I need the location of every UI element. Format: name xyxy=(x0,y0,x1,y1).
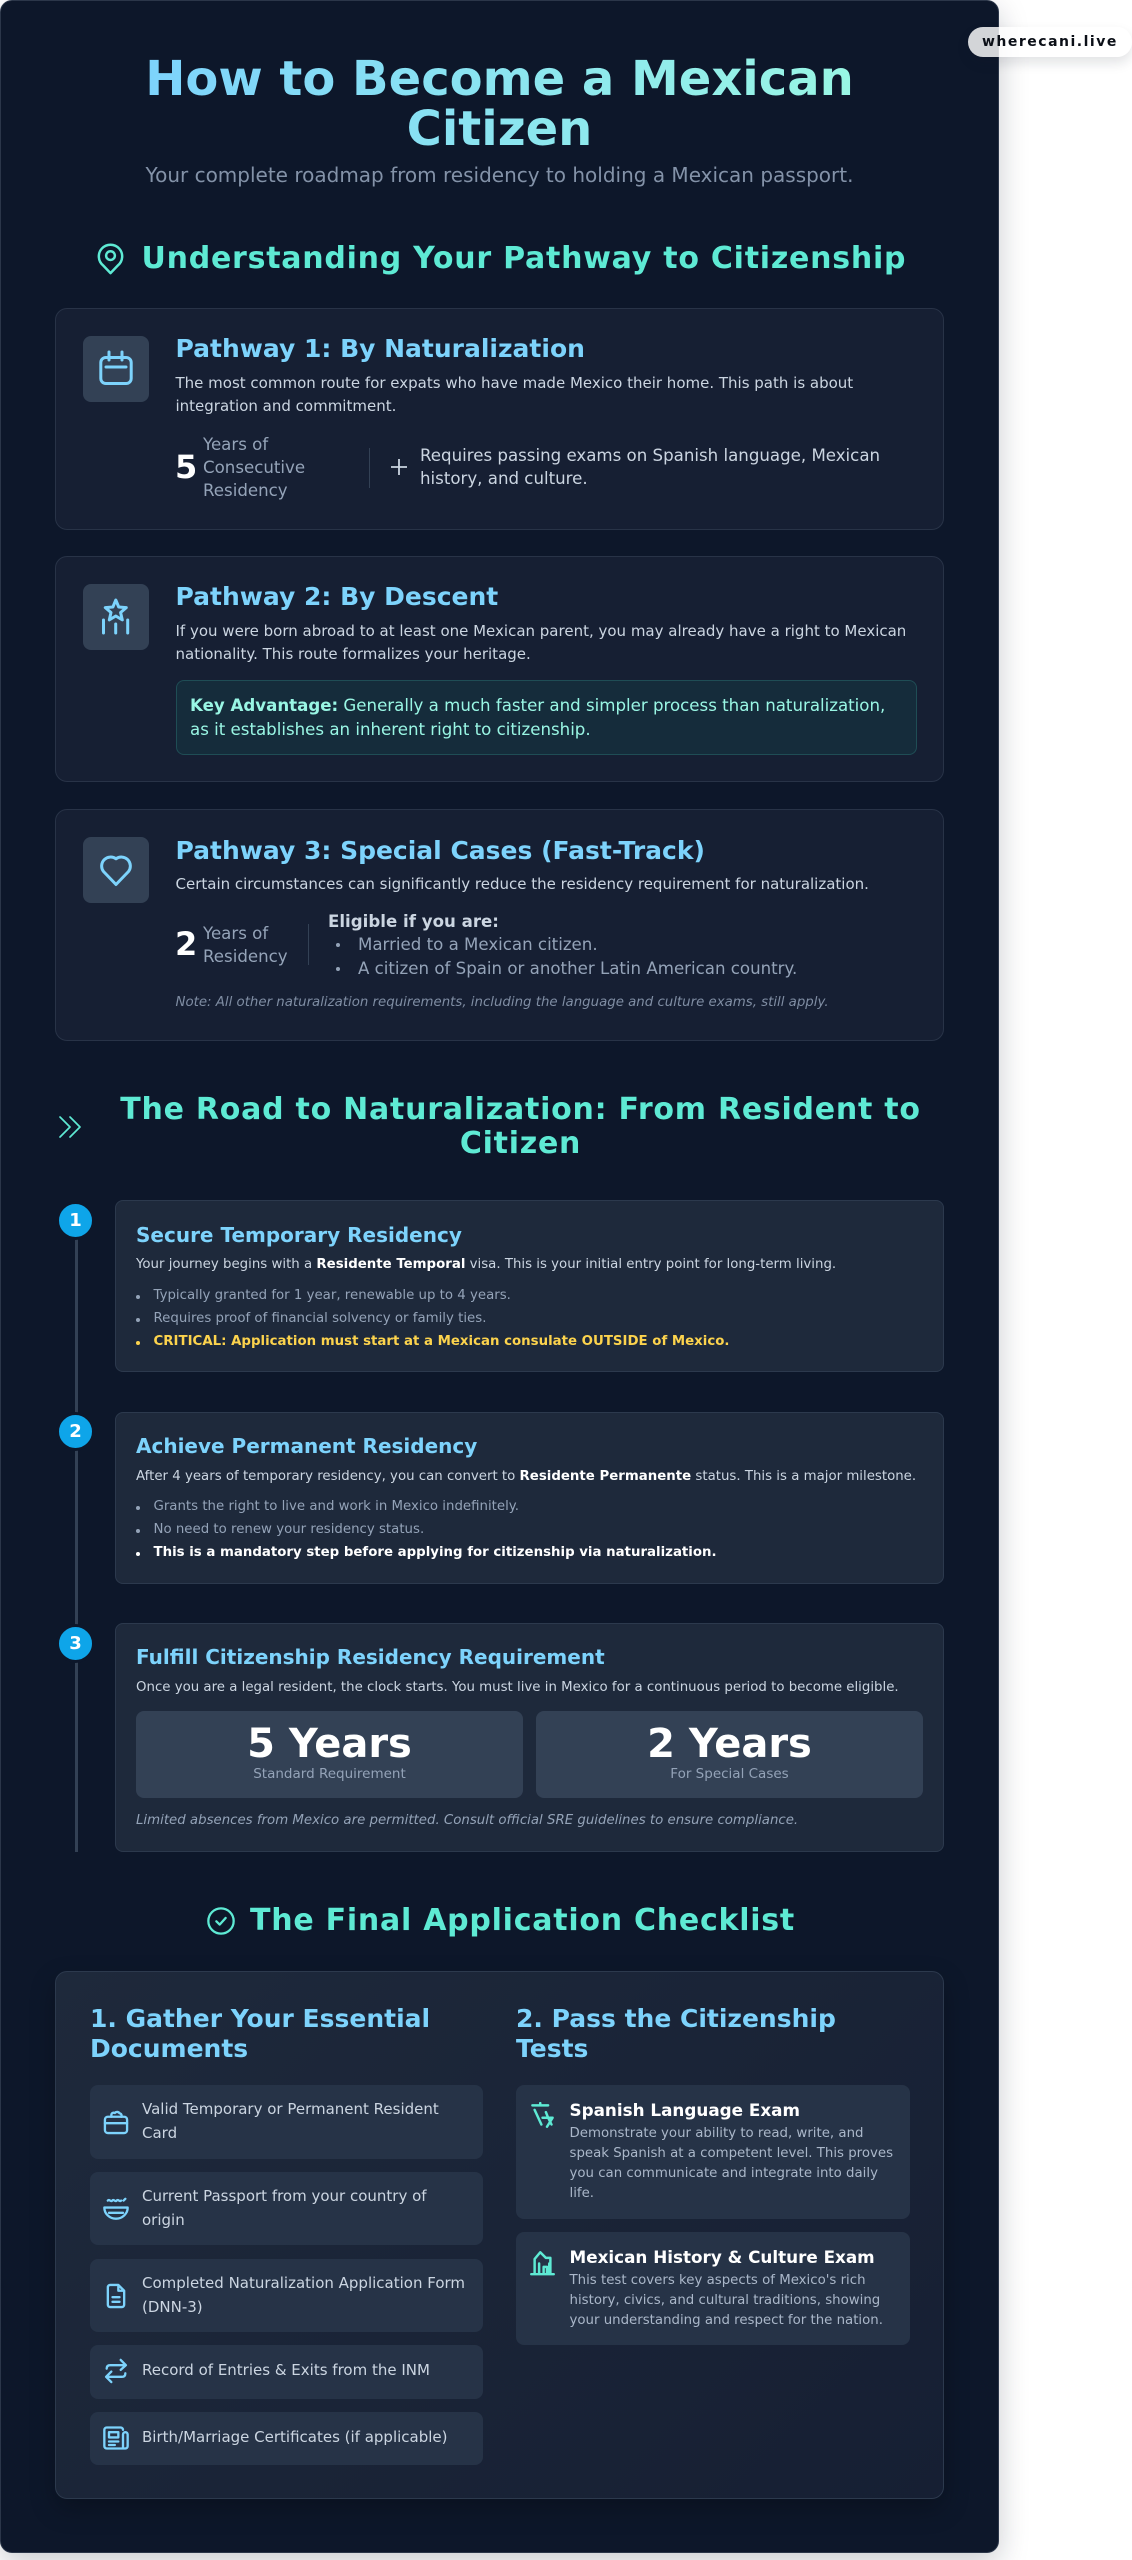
icon: card xyxy=(104,2110,128,2134)
heading: pathway 3: Pathway 3: Special Cases (Fast-Track) xyxy=(176,836,705,865)
item: resident card xyxy=(90,2085,483,2159)
panel: step 3 xyxy=(115,1623,944,1852)
text: Birth/Marriage Certificates (if applicable) xyxy=(142,2428,448,2446)
bullet xyxy=(136,1318,140,1322)
item: Typically granted for 1 year, renewable up to 4 years. xyxy=(154,1288,511,1303)
text: origin xyxy=(142,2211,185,2229)
title: Citizen xyxy=(407,101,592,157)
subtitle: Your complete roadmap from residency to holding a Mexican passport. xyxy=(146,163,853,187)
item: No need to renew your residency status. xyxy=(154,1522,424,1537)
description: history, civics, and cultural traditions, showing xyxy=(570,2293,880,2308)
icon: swap arrows xyxy=(104,2358,128,2384)
step number 1: 1 xyxy=(69,1210,82,1231)
text: Valid Temporary or Permanent Resident xyxy=(142,2100,439,2118)
heading: pass tests: Tests xyxy=(516,2034,588,2063)
text: key advantage: as it establishes an inherent right to citizenship. xyxy=(190,720,591,738)
bullet xyxy=(136,1552,140,1556)
text: pathway 3 description: Certain circumstances can significantly reduce the residency requirement for naturalization. xyxy=(176,875,869,893)
caption: For Special Cases xyxy=(670,1766,789,1782)
value: 2 Years xyxy=(647,1721,812,1767)
step number 3: 3 xyxy=(69,1633,82,1654)
label: years of residency: Years of xyxy=(203,924,268,943)
heading: step 1: Secure Temporary Residency xyxy=(136,1223,462,1247)
heading: pathway 1: Pathway 1: By Naturalization xyxy=(176,334,585,363)
item: spanish exam xyxy=(516,2085,910,2219)
text: pathway 2 description: If you were born abroad to at least one Mexican parent, you may already have a right to Mexican xyxy=(176,622,906,640)
stat box: 2 years xyxy=(536,1711,923,1798)
bullet xyxy=(136,1341,140,1345)
bullet xyxy=(136,1506,140,1510)
item: application form xyxy=(90,2259,483,2332)
text: exam requirement: Requires passing exams on Spanish language, Mexican xyxy=(420,446,880,465)
title: Mexican History & Culture Exam xyxy=(570,2247,875,2267)
panel: pathway 1 xyxy=(55,308,944,530)
item: entries and exits xyxy=(90,2345,483,2399)
list: step 2 xyxy=(136,1499,717,1560)
heading: final application checklist: The Final Application Checklist xyxy=(250,1903,795,1938)
heading: gather documents: Documents xyxy=(90,2034,248,2063)
panel: checklist xyxy=(55,1971,944,2499)
icon: bowl xyxy=(103,2198,129,2220)
icon: map pin xyxy=(98,244,124,274)
caption: Standard Requirement xyxy=(253,1766,406,1782)
text: Current Passport from your country of xyxy=(142,2187,427,2205)
icon: star with lines xyxy=(83,584,149,650)
text: Card xyxy=(142,2124,177,2142)
callout: key advantage xyxy=(176,680,917,755)
text: pathway 1 description: integration and commitment. xyxy=(176,397,396,415)
heading: the road to naturalization xyxy=(120,1092,921,1161)
label: years of consecutive residency: Consecutive xyxy=(203,458,305,477)
badge: wherecani.live: wherecani.live xyxy=(982,34,1118,50)
list item: citizen of spain: A citizen of Spain or another Latin American country. xyxy=(358,959,797,978)
text: step 1 description: Your journey begins with a Residente Temporal visa. This is your initial entry point for long-term living. xyxy=(136,1257,836,1272)
bullet xyxy=(136,1295,140,1299)
item: Requires proof of financial solvency or family ties. xyxy=(154,1311,486,1326)
item: Grants the right to live and work in Mexico indefinitely. xyxy=(154,1499,519,1514)
badge: wherecani.live xyxy=(968,27,1132,57)
description: your understanding and respect for the nation. xyxy=(570,2313,883,2328)
title: How to Become a Mexican xyxy=(145,51,854,107)
stat: 2 years: 2 xyxy=(175,925,197,963)
title: Spanish Language Exam xyxy=(570,2100,800,2120)
icon: newspaper xyxy=(103,2426,129,2450)
heading: eligible: Eligible if you are: xyxy=(328,912,499,931)
note: naturalization requirements: Note: All other naturalization requirements, including the language and culture exams, still apply. xyxy=(176,995,829,1010)
description: you can communicate and integrate into daily xyxy=(570,2166,878,2181)
heading: pathway 2: Pathway 2: By Descent xyxy=(176,582,498,611)
panel: step 2 xyxy=(115,1412,944,1584)
text: key advantage xyxy=(190,696,885,738)
list: step 1 xyxy=(136,1288,729,1349)
bullet xyxy=(136,1529,140,1533)
heading: step 3: Fulfill Citizenship Residency Requirement xyxy=(136,1645,605,1669)
item: critical: CRITICAL: Application must start at a Mexican consulate OUTSIDE of Mexico. xyxy=(154,1334,729,1349)
title xyxy=(145,51,854,157)
item: passport xyxy=(90,2172,483,2245)
heading: the road to naturalization: The Road to Naturalization: From Resident to xyxy=(120,1092,921,1127)
label: years of consecutive residency xyxy=(203,435,305,500)
text: Record of Entries & Exits from the INM xyxy=(142,2361,430,2379)
icon: calendar xyxy=(83,336,149,402)
heading: understanding your pathway: Understanding Your Pathway to Citizenship xyxy=(142,241,906,276)
text: exam requirement xyxy=(420,446,880,488)
text: key advantage: Key Advantage: Generally a much faster and simpler process than naturalization, xyxy=(190,696,885,715)
timeline line xyxy=(75,1204,78,1852)
description: This test covers key aspects of Mexico's rich xyxy=(570,2273,866,2288)
text: step 2 description: After 4 years of temporary residency, you can convert to Residente Permanente status. This is a major milestone. xyxy=(136,1469,916,1484)
note: absences: Limited absences from Mexico are permitted. Consult official SRE guidelines to ensure compliance. xyxy=(136,1813,798,1828)
icon: heart xyxy=(83,837,149,903)
text: exam requirement: history, and culture. xyxy=(420,469,588,488)
stat: 5 years: 5 xyxy=(175,448,197,486)
panel: step 1 xyxy=(115,1200,944,1372)
icon: circle check xyxy=(207,1907,235,1935)
label: years of residency: Residency xyxy=(203,947,288,966)
text: pathway 2 description: nationality. This route formalizes your heritage. xyxy=(176,645,531,663)
text: pathway 1 description xyxy=(175,374,853,415)
divider xyxy=(369,448,370,488)
heading: pass tests xyxy=(516,2004,836,2063)
icon: building xyxy=(530,2251,555,2276)
panel: pathway 2 xyxy=(55,556,944,782)
description: Demonstrate your ability to read, write, and xyxy=(570,2126,863,2141)
list item: married: Married to a Mexican citizen. xyxy=(358,935,598,954)
text: step 3 description: Once you are a legal resident, the clock starts. You must live in Mexico for a continuous period to become eligible. xyxy=(136,1680,899,1695)
heading: step 2: Achieve Permanent Residency xyxy=(136,1434,477,1458)
heading: gather documents xyxy=(90,2004,430,2063)
text xyxy=(142,2274,465,2316)
text: Completed Naturalization Application Form xyxy=(142,2274,465,2292)
heading: gather documents: 1. Gather Your Essential xyxy=(90,2004,430,2033)
heading: the road to naturalization: Citizen xyxy=(460,1126,581,1161)
description xyxy=(569,2273,883,2328)
item: history exam xyxy=(516,2232,910,2345)
label: years of residency xyxy=(203,924,288,966)
label: years of consecutive residency: Years of xyxy=(203,435,268,454)
description: life. xyxy=(570,2186,594,2201)
bullet xyxy=(336,967,340,971)
heading: pass tests: 2. Pass the Citizenship xyxy=(516,2004,836,2033)
step number 2: 2 xyxy=(69,1421,82,1442)
text xyxy=(142,2187,427,2229)
icon: language xyxy=(531,2102,554,2128)
stat box: 5 years xyxy=(136,1711,523,1798)
icon: plus xyxy=(391,459,407,475)
value: 5 Years xyxy=(247,1721,412,1767)
text xyxy=(142,2100,439,2142)
step number 1 xyxy=(56,1201,95,1240)
label: years of consecutive residency: Residency xyxy=(203,481,288,500)
item: mandatory: This is a mandatory step before applying for citizenship via naturalization. xyxy=(154,1545,717,1560)
description: speak Spanish at a competent level. This proves xyxy=(570,2146,893,2161)
text: (DNN-3) xyxy=(142,2298,203,2316)
panel: pathway 3 xyxy=(55,809,944,1041)
description xyxy=(570,2126,893,2201)
bullet xyxy=(336,943,340,947)
divider xyxy=(308,924,309,965)
icon: document xyxy=(106,2284,126,2308)
text: pathway 2 description xyxy=(176,622,906,663)
text: eligibility list xyxy=(328,912,797,978)
step number 2 xyxy=(56,1412,95,1451)
step number 3 xyxy=(56,1624,95,1663)
text: pathway 1 description: The most common route for expats who have made Mexico their home. This path is about xyxy=(176,374,853,392)
item: certificates xyxy=(90,2412,483,2465)
icon: double chevron xyxy=(59,1116,81,1138)
